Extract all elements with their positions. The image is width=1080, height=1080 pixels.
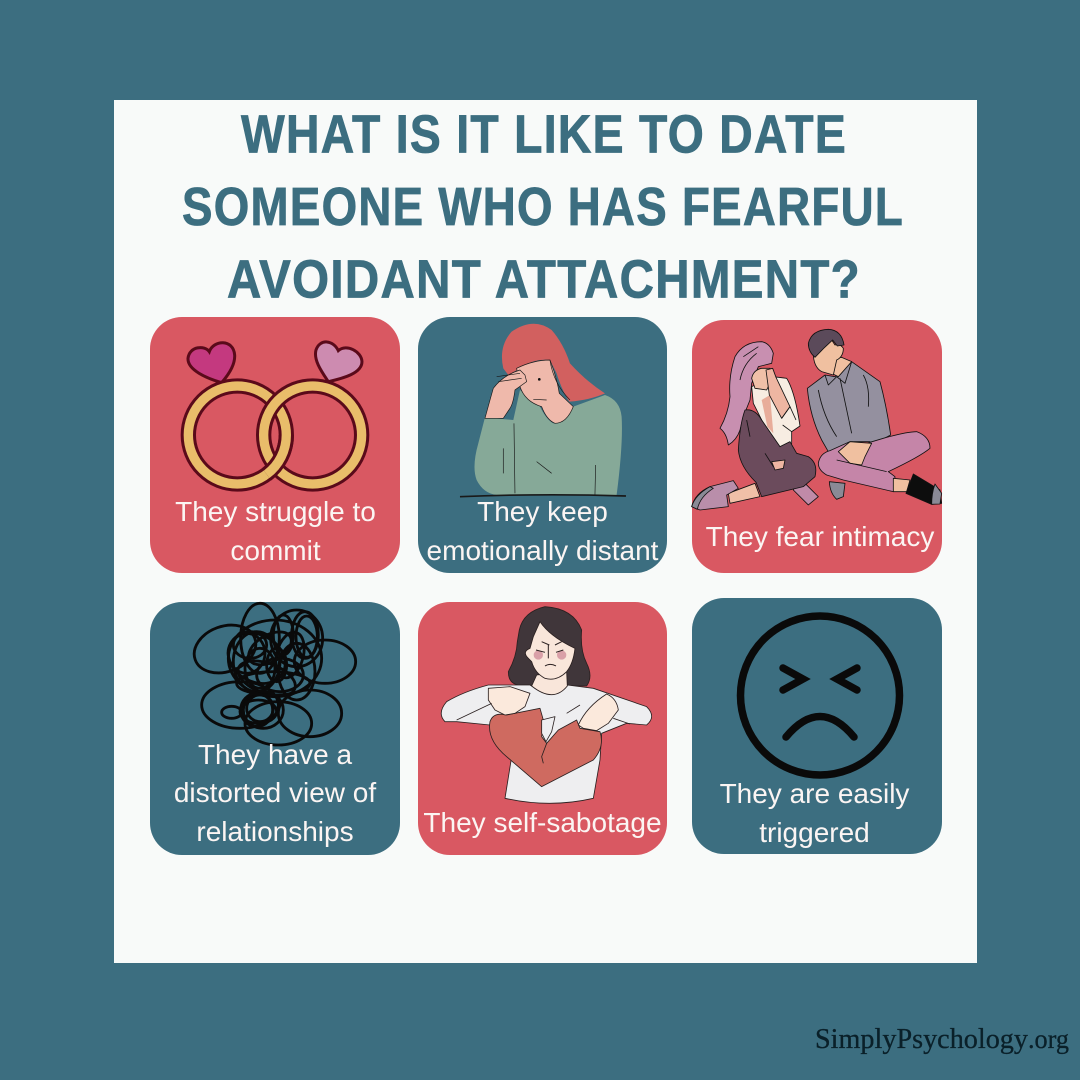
- icon: interlocked rings with hearts: [188, 342, 362, 484]
- source credit: SimplyPsychology: [815, 1023, 1028, 1055]
- caption: emotionally distant: [427, 535, 659, 566]
- illustration: woman tearing heart: [441, 607, 652, 803]
- illustration: sitting woman: [692, 342, 818, 510]
- title: SOMEONE WHO HAS FEARFUL: [182, 177, 904, 237]
- caption: They struggle to: [175, 496, 376, 527]
- caption: triggered: [759, 817, 870, 848]
- title: AVOIDANT ATTACHMENT?: [227, 250, 861, 310]
- icon: tangled scribble: [187, 603, 356, 745]
- caption: They are easily: [720, 778, 909, 809]
- white panel: [114, 100, 977, 963]
- caption: They keep: [477, 496, 608, 527]
- icon: sad face: [740, 616, 900, 775]
- panel: emotionally distant: [418, 317, 667, 573]
- panel: fear intimacy: [692, 320, 942, 573]
- caption: They self-sabotage: [423, 807, 662, 838]
- caption: distorted view of: [174, 777, 376, 808]
- illustration: sitting man: [807, 329, 942, 504]
- caption: They fear intimacy: [706, 521, 934, 552]
- panel: self-sabotage: [418, 602, 667, 855]
- caption: relationships: [196, 816, 354, 847]
- source credit: .org: [1028, 1024, 1069, 1054]
- panel: struggle to commit: [150, 317, 400, 573]
- title: WHAT IS IT LIKE TO DATE: [241, 104, 847, 164]
- panel: easily triggered: [692, 598, 942, 854]
- caption: commit: [230, 535, 321, 566]
- caption: They have a: [198, 739, 352, 770]
- panel: distorted view: [150, 602, 400, 855]
- title: [182, 104, 904, 310]
- illustration: woman holding forehead: [460, 324, 626, 497]
